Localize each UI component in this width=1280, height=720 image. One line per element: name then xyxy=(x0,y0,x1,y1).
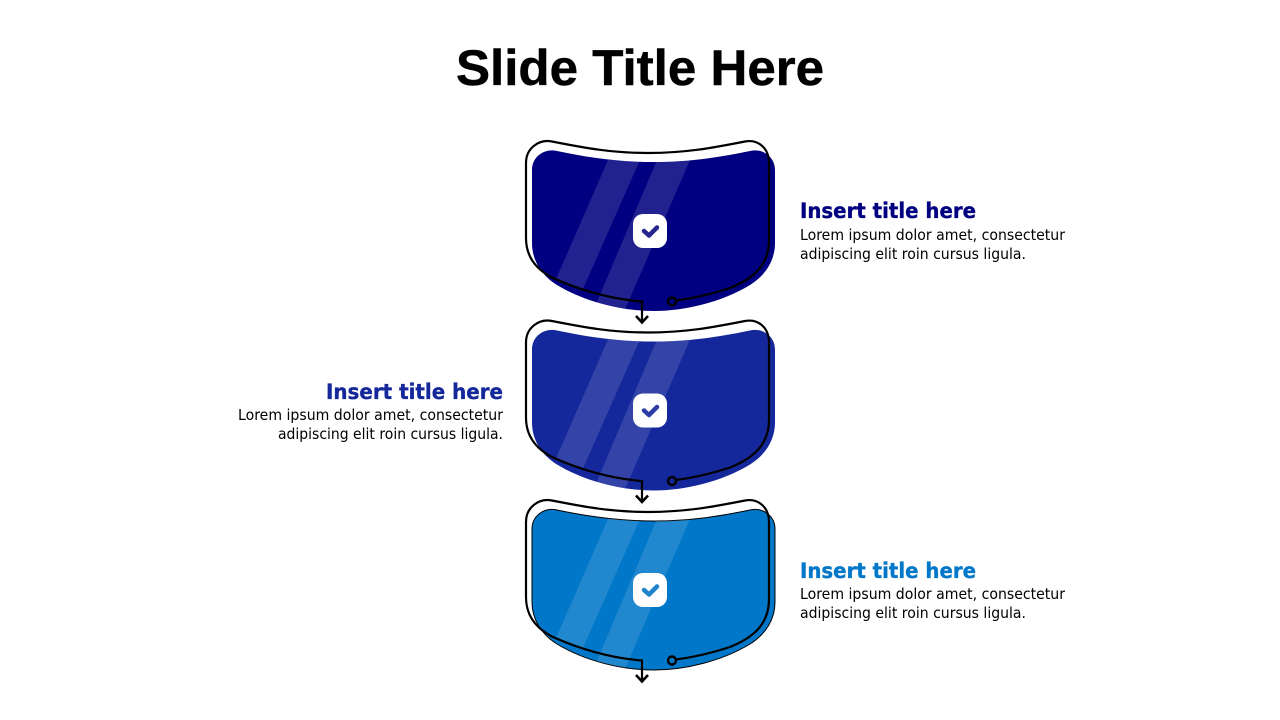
step 1 text: Insert title here xyxy=(800,199,976,223)
step 3 check icon xyxy=(633,573,667,607)
step 2 outline arrow xyxy=(526,321,769,502)
step 3 text: Lorem ipsum dolor amet, consectetur xyxy=(800,585,1066,603)
step 2 text: Insert title here xyxy=(326,380,503,404)
step 1 outline arrow xyxy=(526,141,769,322)
step 2 check icon xyxy=(633,394,667,428)
step 3 outline arrow xyxy=(526,500,769,682)
step 2 fill xyxy=(532,330,775,490)
step 2 text: Lorem ipsum dolor amet, consectetur xyxy=(238,406,504,424)
step 1 text: Lorem ipsum dolor amet, consectetur xyxy=(800,226,1066,244)
step 3 shape xyxy=(526,500,775,682)
step 3 text: Insert title here xyxy=(800,559,976,583)
step 3 fill xyxy=(532,509,775,670)
step 1 text: adipiscing elit roin cursus ligula. xyxy=(800,245,1026,263)
step 1 check icon xyxy=(633,214,667,248)
step 2 shape xyxy=(526,321,775,502)
title: Slide Title Here xyxy=(456,40,824,96)
step 3 glare stripes xyxy=(556,519,690,671)
step 1 glare stripes xyxy=(556,160,690,312)
step 3 text: adipiscing elit roin cursus ligula. xyxy=(800,604,1026,622)
step 3 text xyxy=(800,559,1066,622)
step 1 text xyxy=(800,199,1066,263)
step 2 glare stripes xyxy=(556,340,690,492)
step 1 shape xyxy=(526,141,775,322)
step 2 text xyxy=(238,380,504,443)
step 1 fill xyxy=(532,150,775,311)
step 2 text: adipiscing elit roin cursus ligula. xyxy=(278,425,503,443)
